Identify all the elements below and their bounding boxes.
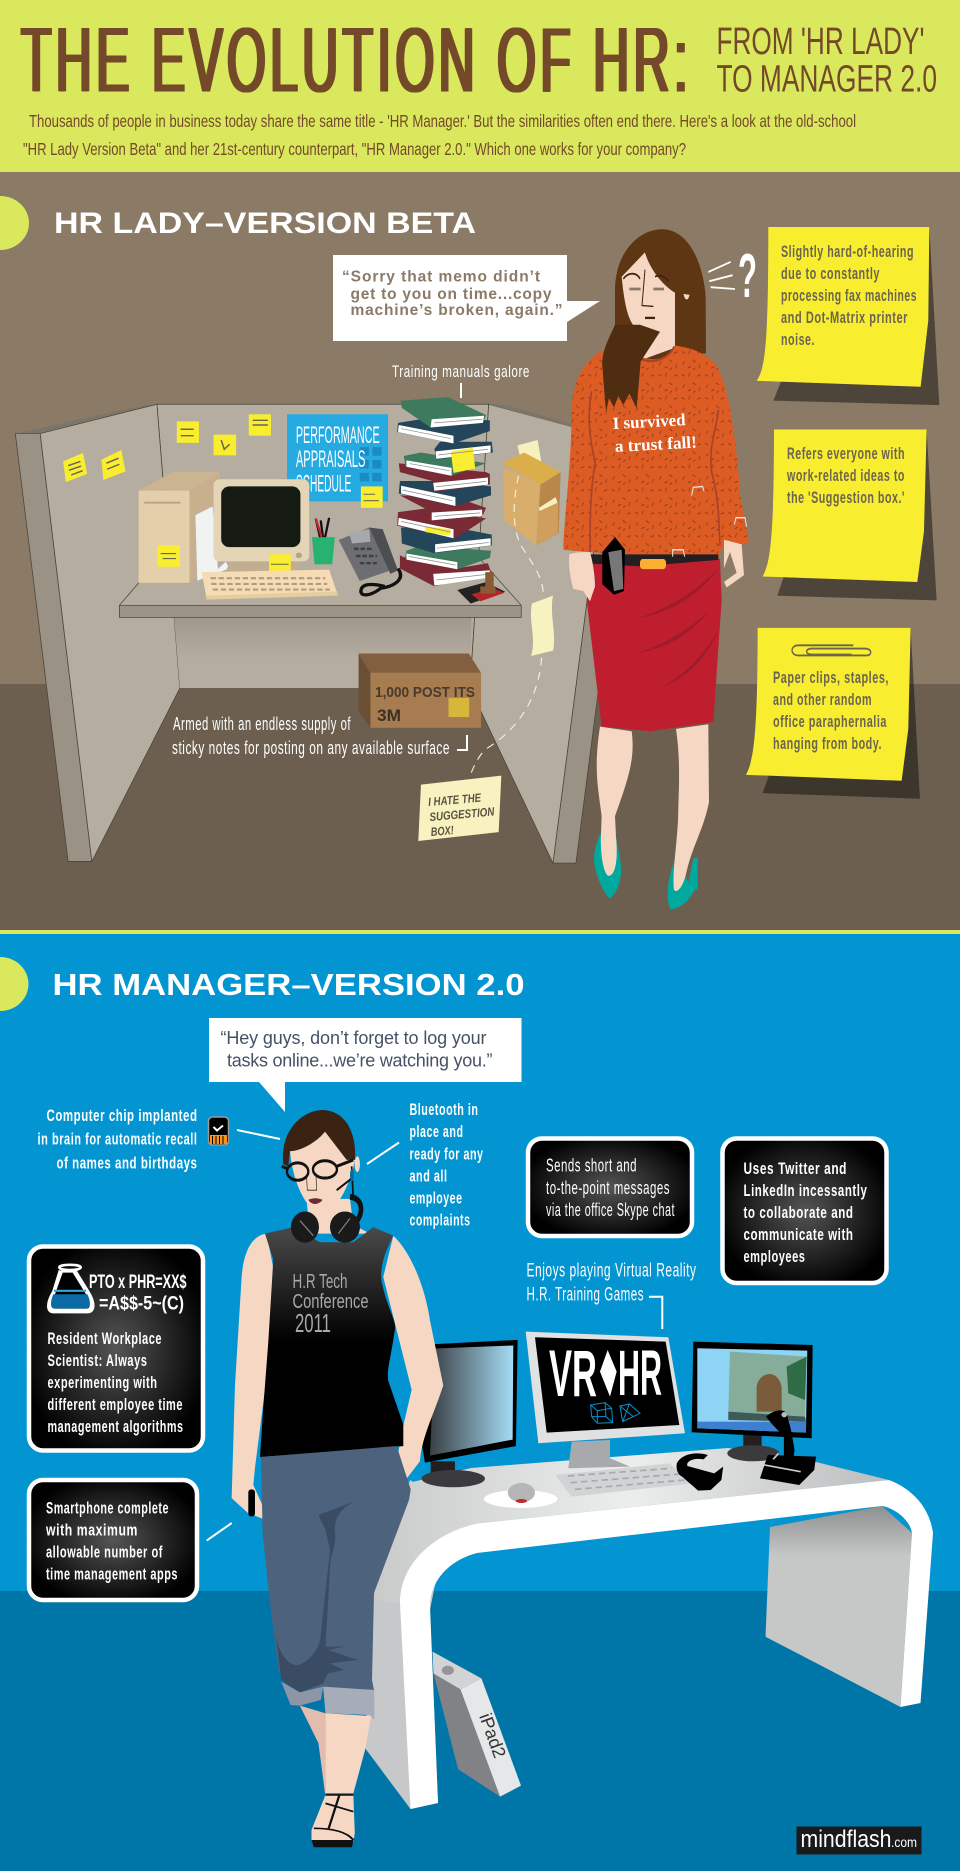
trousers: [261, 1446, 411, 1847]
shoes: [594, 835, 698, 909]
shirt slogan: a trust fall!: [614, 433, 697, 456]
formula: PTO x PHR=XX$: [89, 1272, 187, 1293]
panel: HR lady section: HR: [618, 1337, 662, 1409]
VR goggles: [677, 1453, 723, 1491]
sticky notes on wall: [63, 414, 271, 482]
cubicle: [15, 397, 631, 863]
callout: Twitter and LinkedIn: employees: [744, 1248, 806, 1266]
sticky note: suggestion box: [763, 429, 937, 600]
section marker: [0, 957, 28, 1011]
speech bubble: HR lady: machine’s broken, again.”: [350, 302, 562, 319]
panel: HR manager section: [0, 934, 960, 1871]
callout: smartphone: time management apps: [46, 1566, 178, 1584]
sticky note: paper clips: and other random: [773, 691, 872, 709]
desk: [365, 1448, 933, 1809]
VR monitor: [526, 1332, 685, 1468]
callout: workplace scientist: Resident Workplace: [48, 1330, 162, 1348]
pen cup: [312, 518, 335, 564]
heading: HR lady: HR LADY–VERSION BETA: [54, 207, 476, 240]
speech bubble: HR manager: “Hey guys, don’t forget to log your: [220, 1028, 486, 1048]
question mark: ?: [738, 242, 757, 311]
arms: [232, 1234, 443, 1520]
speech bubble: HR manager: tasks online...we’re watching you.”: [227, 1050, 492, 1070]
note: I hate the suggestion box: [418, 776, 501, 841]
hair lock: [602, 325, 660, 412]
callout: smartphone: allowable number of: [46, 1544, 163, 1562]
keyboard and mouse: [484, 1463, 693, 1508]
right leg shade: [766, 1506, 912, 1707]
caption: virtual reality: [526, 1260, 696, 1329]
callout: smartphone: with maximum: [45, 1522, 138, 1540]
figure: HR manager upper body: [232, 1110, 443, 1520]
face details: [623, 274, 668, 281]
callout: workplace scientist: different employee time: [48, 1396, 183, 1414]
performance poster: APPRAISALS: [296, 446, 365, 473]
caption: training manuals: Training manuals galore: [392, 363, 530, 381]
computer tower: [139, 472, 220, 583]
belt: [590, 554, 718, 566]
poster sticky: [361, 486, 383, 508]
callout: Twitter and LinkedIn: to collaborate and: [744, 1204, 854, 1222]
shirt print: Conference: [292, 1291, 368, 1313]
callout: Twitter and LinkedIn: communicate with: [744, 1226, 854, 1244]
dashed paper trail: [471, 476, 543, 774]
iPad box: [433, 1652, 521, 1797]
icon: bluetooth headset: [337, 1166, 353, 1199]
desk surface: [372, 1448, 889, 1603]
caption: bluetooth: [367, 1101, 484, 1230]
tank top: [260, 1227, 403, 1457]
callout: Twitter and LinkedIn: LinkedIn incessantly: [744, 1182, 868, 1200]
shirt print: H.R Tech: [292, 1271, 348, 1293]
callout: smartphone: [29, 1480, 232, 1600]
monitor: [214, 479, 309, 572]
icon: wireframe pyramid: [620, 1404, 640, 1422]
callout: workplace scientist: experimenting with: [48, 1374, 158, 1392]
neck: [283, 1199, 370, 1234]
left leg shade: [365, 1480, 480, 1809]
shirt print: 2011: [295, 1308, 331, 1338]
intro text: "HR Lady Version Beta" and her 21st-century counterpart, "HR Manager 2.0." Which one works for your company?: [23, 139, 686, 159]
callout: workplace scientist: Scientist: Always: [48, 1352, 148, 1370]
callout: smartphone: Smartphone complete: [46, 1500, 169, 1518]
glasses: [282, 1160, 353, 1180]
hair back: [615, 229, 706, 362]
icon: wireframe cube: [591, 1403, 613, 1423]
headphones: [350, 1197, 361, 1225]
sandal: [311, 1795, 355, 1842]
caption: bluetooth: Bluetooth in: [410, 1101, 478, 1119]
caption: bluetooth: and all: [410, 1168, 448, 1186]
speech bubble: HR manager: [209, 1018, 522, 1112]
icon: computer chip: [208, 1117, 228, 1145]
sticky note: hearing: due to constantly: [781, 265, 880, 283]
box label: [375, 684, 475, 725]
section marker: [0, 196, 29, 250]
VR HR logo: VR: [549, 1336, 597, 1410]
callout: Skype chat: via the office Skype chat: [546, 1200, 675, 1220]
shirt slogan: [612, 410, 697, 456]
speech bubble: HR lady: get to you on time...copy: [350, 286, 552, 303]
caption: computer chip: in brain for automatic recall: [38, 1130, 198, 1148]
joystick: [760, 1410, 816, 1485]
telephone: [339, 527, 400, 595]
desk front band: [400, 1480, 933, 1809]
subtitle: [716, 21, 937, 100]
figure: HR lady: [563, 229, 749, 909]
page lines: [401, 419, 489, 580]
note text: BOX!: [430, 823, 454, 839]
callout: Skype chat: Sends short and: [546, 1156, 637, 1176]
sticky note: hearing: noise.: [781, 331, 815, 349]
speech bubble: HR lady: “Sorry that memo didn’t: [342, 268, 540, 286]
performance poster: [287, 414, 388, 501]
neck and face: [622, 252, 675, 359]
box of post-its: [359, 654, 481, 728]
caption: computer chip: Computer chip implanted: [46, 1107, 198, 1125]
header band: [0, 0, 960, 172]
caption: bluetooth: ready for any: [410, 1146, 484, 1164]
heading: HR manager: HR MANAGER–VERSION 2.0: [52, 967, 524, 1002]
performance poster: SCHEDULE: [296, 470, 351, 497]
right monitor: [692, 1342, 813, 1461]
sticky note: paper clips: office paraphernalia: [773, 713, 887, 731]
caption: sticky notes: Armed with an endless supply of: [173, 714, 351, 734]
note text: I HATE THE: [428, 791, 482, 809]
legs: [597, 724, 709, 891]
sticky note: paper clips: [746, 628, 920, 799]
stack of training manuals: [397, 397, 493, 586]
caption: virtual reality: Enjoys playing Virtual Reality: [526, 1260, 696, 1282]
callout: Twitter and LinkedIn: Uses Twitter and: [744, 1160, 847, 1178]
intro text: [23, 111, 856, 159]
falling paper: [531, 596, 554, 656]
smartphone: [248, 1489, 255, 1516]
hands: [569, 552, 595, 601]
skirt: [587, 559, 722, 731]
iPad box: iPad2: [475, 1711, 510, 1761]
shirt slogan: I survived: [612, 410, 687, 433]
box label: 3M: [377, 706, 401, 725]
cubicle: PERFORMANCE: [296, 422, 380, 449]
caption: sticky notes: sticky notes for posting on any available surface: [172, 738, 450, 758]
logo: mindflash: mindflash: [800, 1826, 892, 1853]
suggestion box: [502, 440, 561, 545]
legs: [300, 1706, 325, 1797]
caption: training manuals: [392, 363, 530, 398]
left monitor: [421, 1340, 518, 1487]
callout: Skype chat: [528, 1138, 692, 1236]
icon: flask: [48, 1265, 93, 1312]
caption: bluetooth: employee: [410, 1190, 462, 1208]
sticky scribbles: [68, 420, 268, 475]
logo: mindflash: .com: [891, 1834, 917, 1850]
sweater: [563, 345, 749, 559]
sticky note: paper clips: hanging from body.: [773, 735, 882, 753]
callout: Twitter and LinkedIn: [722, 1138, 886, 1283]
hair: [283, 1110, 355, 1166]
callout: workplace scientist: [29, 1246, 203, 1450]
sticky note: hearing: [757, 227, 939, 405]
keyboard: [202, 570, 338, 600]
rubber stamp: [457, 572, 505, 604]
note text: SUGGESTION: [429, 804, 495, 824]
stapler: [602, 537, 625, 595]
hearing lines: [708, 262, 735, 289]
formula: [89, 1272, 187, 1314]
sticky note: paper clips: Paper clips, staples,: [773, 669, 889, 687]
staples: [673, 486, 747, 557]
caption: bluetooth: place and: [410, 1123, 464, 1141]
shirt print: [292, 1271, 368, 1338]
icon: paper clip: [792, 645, 871, 655]
speech bubble: HR lady: [333, 255, 600, 341]
paper stack: [195, 506, 230, 581]
callout: workplace scientist: management algorithms: [48, 1418, 184, 1436]
box label: 1,000 POST ITS: [375, 684, 475, 701]
note text: [428, 790, 496, 839]
caption: computer chip: [38, 1107, 280, 1172]
caption: computer chip: of names and birthdays: [56, 1154, 198, 1172]
face: [290, 1132, 355, 1216]
callout: Skype chat: to-the-point messages: [546, 1178, 670, 1198]
caption: bluetooth: complaints: [410, 1212, 470, 1230]
formula: =A$$-5~(C): [99, 1294, 184, 1314]
caption: sticky notes: [172, 714, 467, 758]
caption: virtual reality: H.R. Training Games: [526, 1284, 644, 1306]
